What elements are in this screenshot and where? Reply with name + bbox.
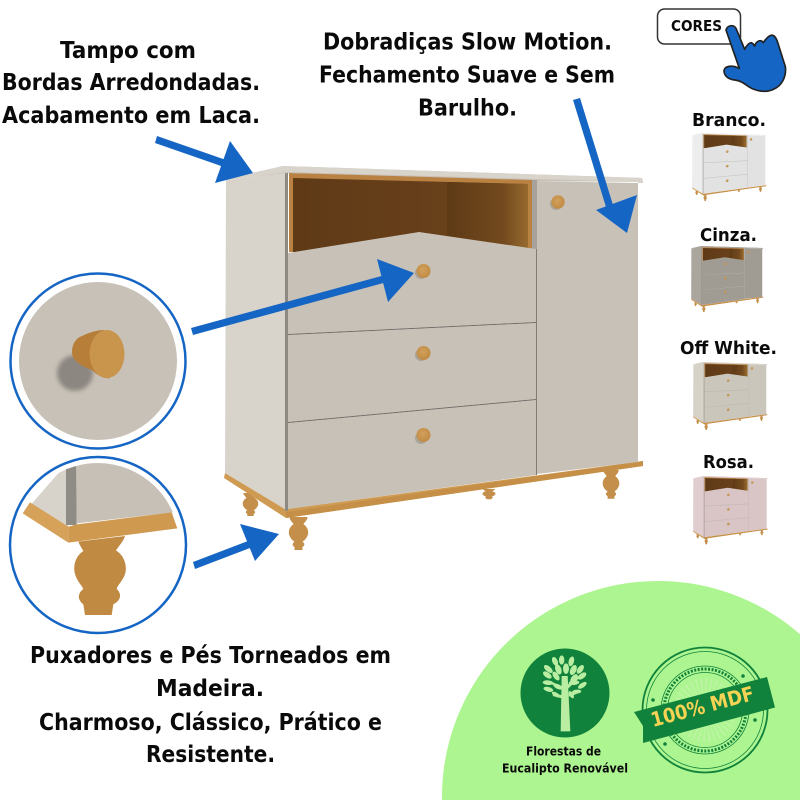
badge: 100% MDF stamp bbox=[634, 648, 775, 772]
green background circle bbox=[442, 581, 800, 800]
arrow: tampo bbox=[155, 136, 253, 183]
detail circle: knob bbox=[10, 274, 186, 448]
cabinet illustration bbox=[224, 166, 643, 550]
arrow: dobradiças bbox=[573, 98, 637, 233]
icon: eucalyptus tree logo bbox=[520, 648, 610, 738]
base bbox=[224, 461, 643, 518]
side panel bbox=[225, 172, 288, 511]
top bbox=[226, 166, 643, 182]
text block: puxadores: Madeira. bbox=[156, 674, 264, 702]
feet bbox=[243, 470, 619, 550]
label: Branco: Branco. bbox=[692, 110, 766, 131]
caption: florestas bbox=[502, 744, 628, 776]
thumbnail: Off White bbox=[693, 362, 767, 430]
open niche bbox=[289, 173, 532, 252]
icon: pointing hand bbox=[724, 26, 786, 91]
drawer fronts bbox=[288, 232, 536, 334]
text block: puxadores: Puxadores e Pés Torneados em bbox=[30, 641, 391, 669]
label: Off White: Off White. bbox=[680, 338, 777, 359]
door bbox=[537, 181, 638, 474]
heading: tampo: Bordas Arredondadas. bbox=[2, 68, 260, 96]
arrow: puxador bbox=[191, 259, 414, 335]
text block: puxadores: Resistente. bbox=[146, 740, 275, 768]
text block: puxadores: Charmoso, Clássico, Prático e bbox=[39, 708, 382, 736]
ribbon text: 100% MDF bbox=[648, 681, 757, 732]
text block: puxadores bbox=[30, 641, 391, 768]
heading: tampo bbox=[2, 36, 260, 129]
heading: dobradiças bbox=[319, 28, 615, 122]
detail circle: foot bbox=[10, 457, 186, 633]
ribbon bbox=[634, 677, 775, 743]
caption: florestas: Eucalipto Renovável bbox=[502, 762, 628, 776]
arrow: pés bbox=[193, 524, 279, 569]
button: cores bbox=[658, 9, 740, 44]
heading: dobradiças: Dobradiças Slow Motion. bbox=[323, 28, 612, 56]
thumbnail: Rosa bbox=[693, 476, 768, 544]
caption: florestas: Florestas de bbox=[526, 744, 601, 758]
thumbnail: Cinza bbox=[691, 246, 763, 312]
label: Rosa: Rosa. bbox=[703, 452, 754, 473]
heading: dobradiças: Fechamento Suave e Sem bbox=[319, 60, 615, 88]
label: Cinza: Cinza. bbox=[700, 225, 757, 246]
button: cores: CORES bbox=[671, 17, 722, 35]
thumbnail: Branco bbox=[692, 133, 766, 201]
heading: tampo: Acabamento em Laca. bbox=[2, 101, 260, 129]
heading: tampo: Tampo com bbox=[60, 36, 196, 64]
heading: dobradiças: Barulho. bbox=[418, 94, 517, 122]
knobs bbox=[415, 195, 565, 444]
